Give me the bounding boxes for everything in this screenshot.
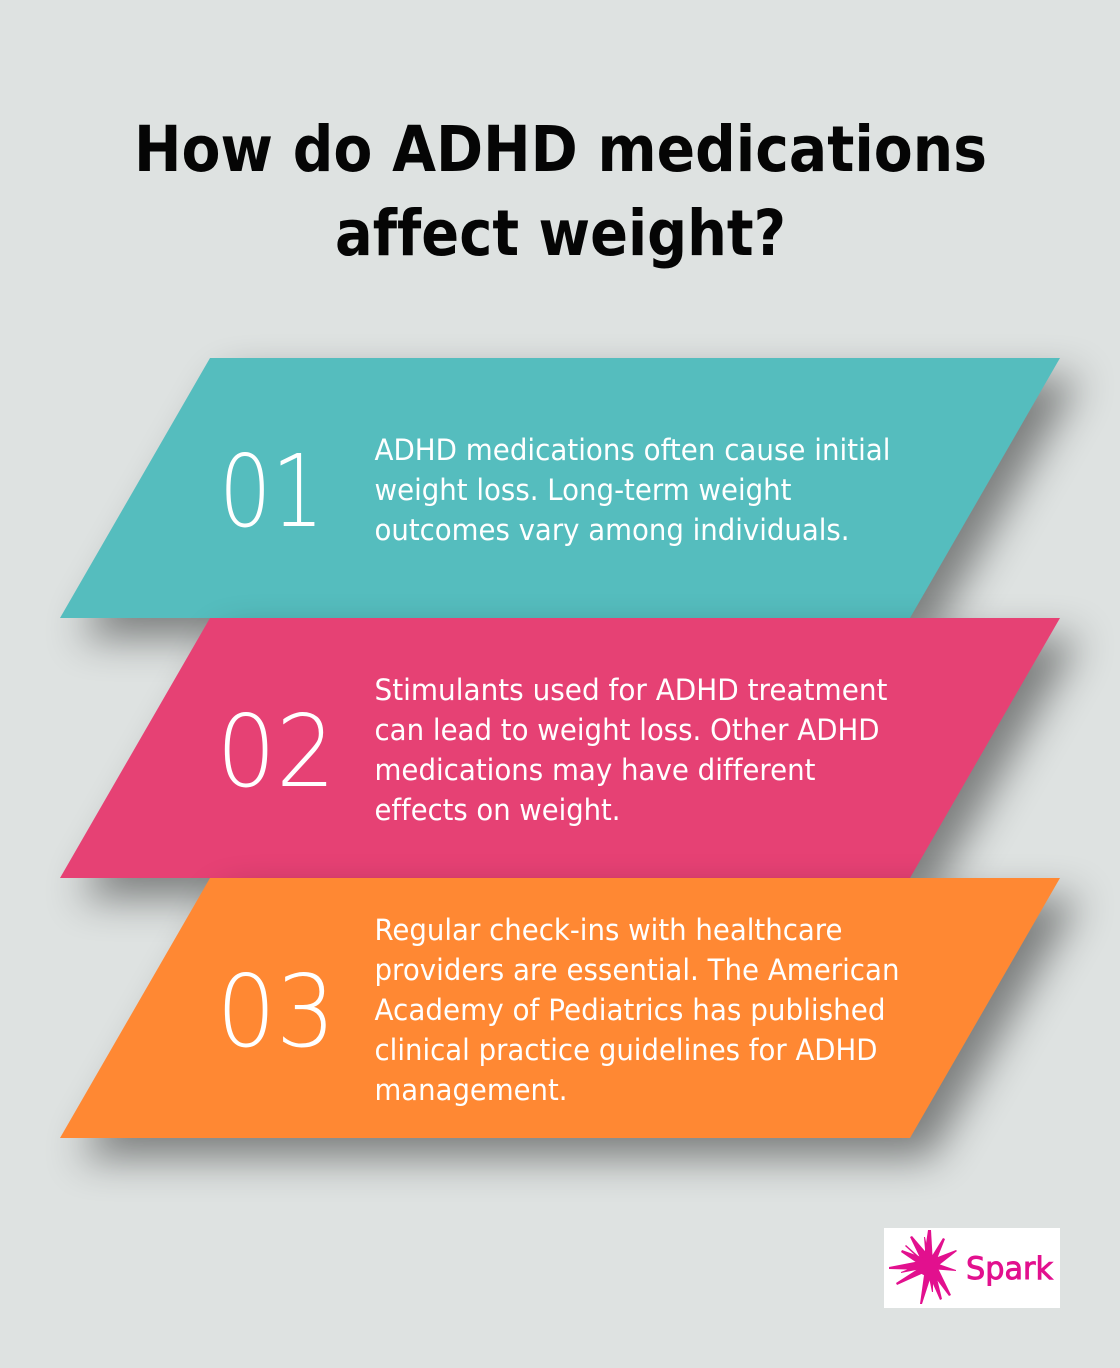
text: step 03: clinical practice guidelines for ADHD xyxy=(374,1033,878,1067)
text: step 02: effects on weight. xyxy=(374,793,620,827)
logo: Spark xyxy=(884,1228,1060,1308)
title: How do ADHD medications xyxy=(134,113,987,186)
text: step 03 xyxy=(374,913,900,1107)
title: affect weight? xyxy=(335,197,786,270)
icon: starburst xyxy=(889,1230,957,1304)
panel: step 01 xyxy=(60,358,1060,618)
text: step 01 xyxy=(374,433,890,547)
text: step 02 xyxy=(374,673,888,827)
number 02: 02 xyxy=(216,693,336,810)
text: step 03: providers are essential. The American xyxy=(374,953,900,987)
text: step 02: Stimulants used for ADHD treatment xyxy=(374,673,888,707)
text: step 01: weight loss. Long-term weight xyxy=(374,473,792,507)
wordmark: Spark xyxy=(966,1251,1053,1287)
text: step 03: Academy of Pediatrics has published xyxy=(374,993,886,1027)
number 03: 03 xyxy=(216,953,336,1070)
text: step 02: medications may have different xyxy=(374,753,816,787)
teal parallelogram xyxy=(60,358,1060,618)
text: step 02: can lead to weight loss. Other ADHD xyxy=(374,713,880,747)
text: step 01: ADHD medications often cause initial xyxy=(374,433,890,467)
number 01: 01 xyxy=(219,433,324,550)
pink parallelogram xyxy=(60,618,1060,878)
panel: step 03 xyxy=(60,878,1060,1138)
text: step 03: management. xyxy=(374,1073,568,1107)
text: step 03: Regular check-ins with healthcare xyxy=(374,913,842,947)
title xyxy=(134,113,987,270)
text: step 01: outcomes vary among individuals. xyxy=(374,513,850,547)
panel: step 02 xyxy=(60,618,1060,878)
orange parallelogram xyxy=(60,878,1060,1138)
